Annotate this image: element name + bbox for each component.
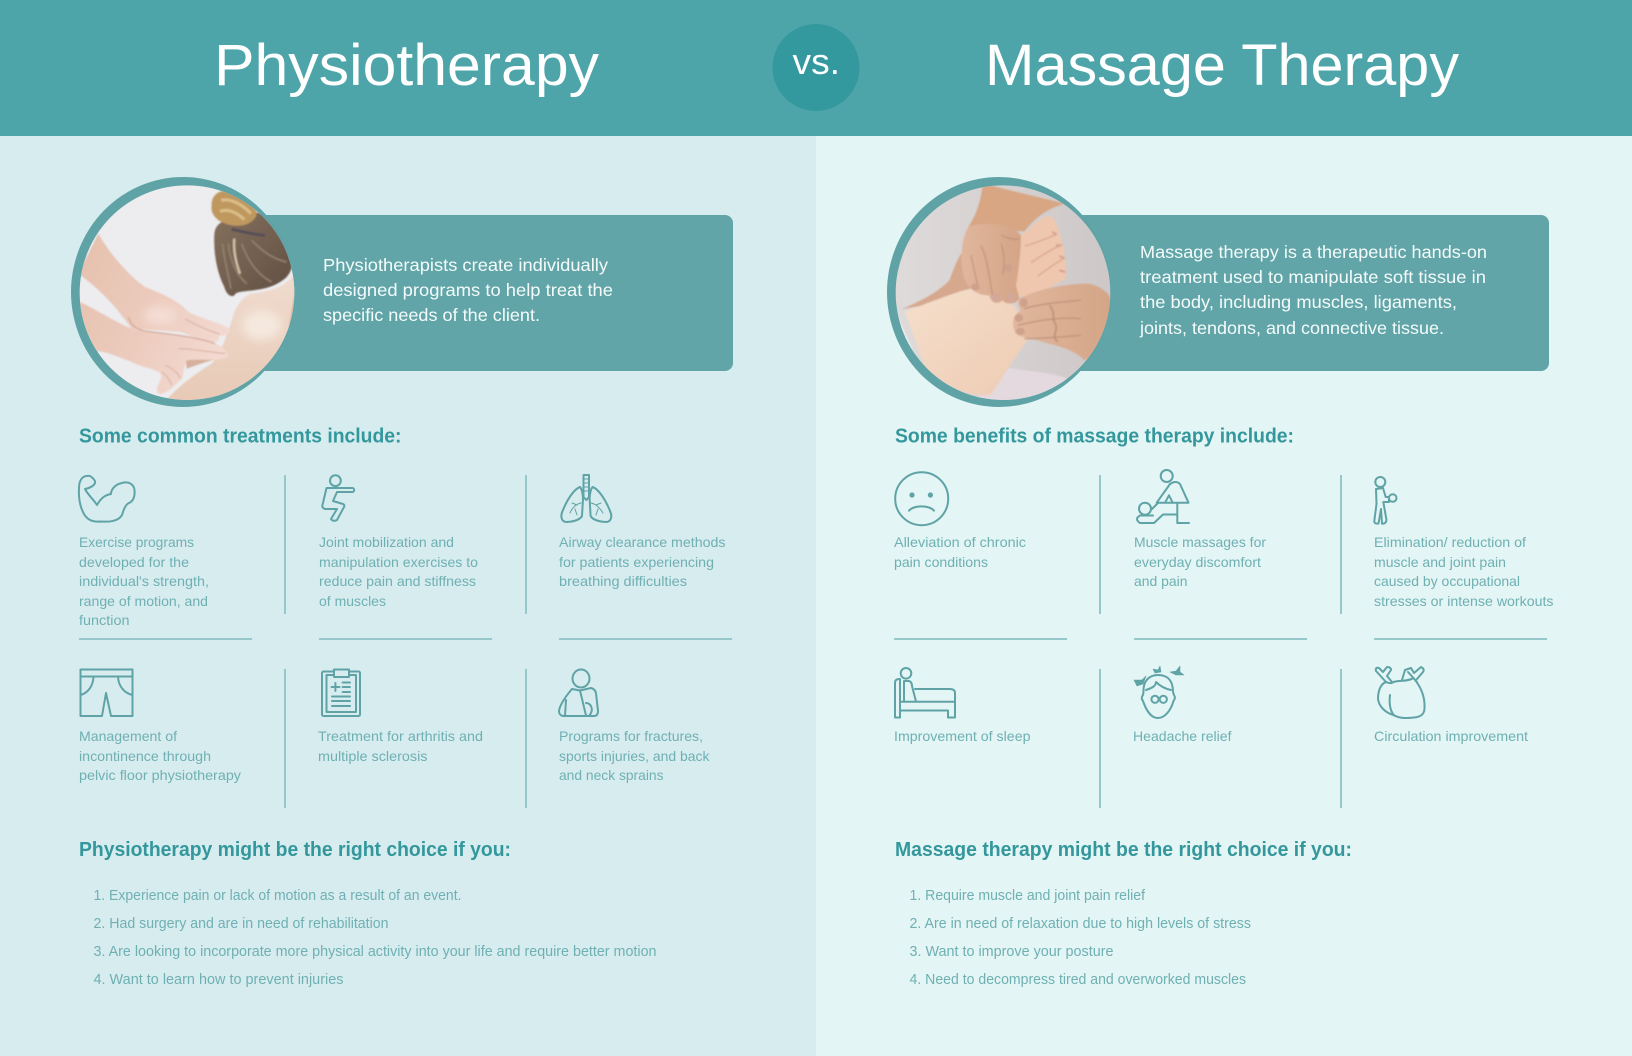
treatment: incontinence [79, 670, 241, 783]
treatment: exercise programs [79, 476, 209, 628]
text: Circulation improvement [1374, 728, 1528, 744]
text: everyday discomfort [1134, 554, 1261, 570]
intro text: specific needs of the client. [323, 305, 540, 325]
benefit: circulation [1374, 667, 1528, 744]
text: Headache relief [1133, 728, 1232, 744]
treatment: joint mobilization [319, 475, 478, 609]
benefit: sleep [894, 668, 1031, 744]
list: massage therapy reasons [910, 888, 1251, 988]
icon: person holding ball [1374, 477, 1396, 524]
list: massage therapy reasons: 4. Need to decompress tired and overworked muscles [910, 972, 1246, 988]
title: physiotherapy: Physiotherapy [214, 33, 599, 98]
intro text: the body, including muscles, ligaments, [1140, 292, 1457, 312]
benefit: occupational pain [1374, 477, 1554, 609]
text: function [79, 612, 130, 628]
intro text: Physiotherapists create individually [323, 255, 608, 275]
text: Alleviation of chronic [894, 534, 1026, 550]
icon: lungs [561, 475, 611, 522]
icon: person in bed [895, 668, 955, 718]
icon: massage therapist and patient [1137, 470, 1189, 523]
text [559, 534, 726, 589]
text: incontinence through [79, 748, 211, 764]
text: Elimination/ reduction of [1374, 534, 1526, 550]
text: and neck sprains [559, 767, 664, 783]
list: massage therapy reasons: 1. Require muscle and joint pain relief [910, 888, 1146, 904]
panel: massage therapy intro [887, 177, 1549, 407]
text: Joint mobilization and [319, 534, 454, 550]
text [894, 534, 1026, 570]
text [318, 728, 483, 764]
text: range of motion, and [79, 593, 208, 609]
icon: person with arm sling [559, 670, 598, 716]
text: muscle and joint pain [1374, 554, 1506, 570]
panel: physiotherapy intro [71, 177, 733, 407]
text: of muscles [319, 593, 386, 609]
text: pelvic floor physiotherapy [79, 767, 241, 783]
title: massage therapy: Massage Therapy [985, 33, 1459, 98]
list: physiotherapy reasons: 3. Are looking to incorporate more physical activity into your life and require better motion [94, 944, 656, 960]
list: massage therapy reasons: 2. Are in need of relaxation due to high levels of stress [910, 916, 1251, 932]
heading: physiotherapy right choice: Physiotherapy might be the right choice if you: [79, 839, 511, 861]
text [79, 534, 209, 628]
badge: vs. [772, 24, 860, 111]
text: Management of [79, 728, 177, 744]
benefit: muscle massages [1134, 470, 1266, 589]
photo ring [887, 177, 1111, 407]
text: manipulation exercises to [319, 554, 478, 570]
grid dividers [79, 475, 1547, 808]
panel: physiotherapy background [0, 136, 816, 1056]
text: caused by occupational [1374, 573, 1520, 589]
intro text: Massage therapy is a therapeutic hands-on [1140, 242, 1487, 262]
text [1374, 534, 1554, 609]
intro text: designed programs to help treat the [323, 280, 613, 300]
text: Treatment for arthritis and [318, 728, 483, 744]
text: individual's strength, [79, 573, 209, 589]
photo: hands on back [75, 182, 298, 405]
list: massage therapy reasons: 3. Want to improve your posture [910, 944, 1114, 960]
photo ring [71, 177, 295, 407]
text: developed for the [79, 554, 189, 570]
icon: anatomical heart [1376, 667, 1425, 718]
text [559, 728, 710, 783]
heading: massage benefits: Some benefits of massage therapy include: [895, 426, 1294, 448]
text: Muscle massages for [1134, 534, 1266, 550]
list: physiotherapy reasons: 1. Experience pain or lack of motion as a result of an event. [94, 888, 462, 904]
text: and pain [1134, 573, 1188, 589]
badge: vs.: vs. [792, 41, 840, 82]
text [319, 534, 478, 609]
panel: massage therapy background [816, 136, 1632, 1056]
intro text: joints, tendons, and connective tissue. [1139, 318, 1444, 338]
icon: shorts [80, 670, 132, 716]
benefit: headache [1133, 666, 1232, 744]
text: Programs for fractures, [559, 728, 703, 744]
text: stresses or intense workouts [1374, 593, 1554, 609]
text: pain conditions [894, 554, 988, 570]
icon: head with circling birds [1134, 666, 1184, 718]
text: reduce pain and stiffness [319, 573, 476, 589]
text: multiple sclerosis [318, 748, 428, 764]
intro text [323, 255, 613, 325]
text [79, 728, 241, 783]
intro box [1016, 215, 1549, 371]
icon: flexed bicep [79, 476, 135, 522]
icon: squatting figure [322, 475, 354, 521]
treatment: fractures and sprains [559, 670, 710, 783]
text: Exercise programs [79, 534, 194, 550]
text: sports injuries, and back [559, 748, 710, 764]
list: physiotherapy reasons: 4. Want to learn how to prevent injuries [94, 972, 344, 988]
photo: foot massage [891, 182, 1114, 405]
benefit: chronic pain [894, 472, 1026, 570]
intro box [200, 215, 733, 371]
heading: common treatments: Some common treatments include: [79, 426, 402, 448]
list: physiotherapy reasons [94, 888, 656, 988]
text: Airway clearance methods [559, 534, 726, 550]
text: breathing difficulties [559, 573, 687, 589]
heading: massage right choice: Massage therapy might be the right choice if you: [895, 839, 1352, 861]
text: Improvement of sleep [894, 728, 1031, 744]
intro text [1139, 242, 1487, 338]
header banner [0, 0, 1632, 136]
list: physiotherapy reasons: 2. Had surgery and are in need of rehabilitation [94, 916, 388, 932]
text [1134, 534, 1266, 589]
treatment: airway clearance [559, 475, 726, 589]
icon: clipboard [322, 670, 360, 716]
text: for patients experiencing [559, 554, 714, 570]
treatment: arthritis and MS [318, 670, 483, 764]
icon: sad face [895, 472, 948, 525]
intro text: treatment used to manipulate soft tissue in [1140, 267, 1486, 287]
